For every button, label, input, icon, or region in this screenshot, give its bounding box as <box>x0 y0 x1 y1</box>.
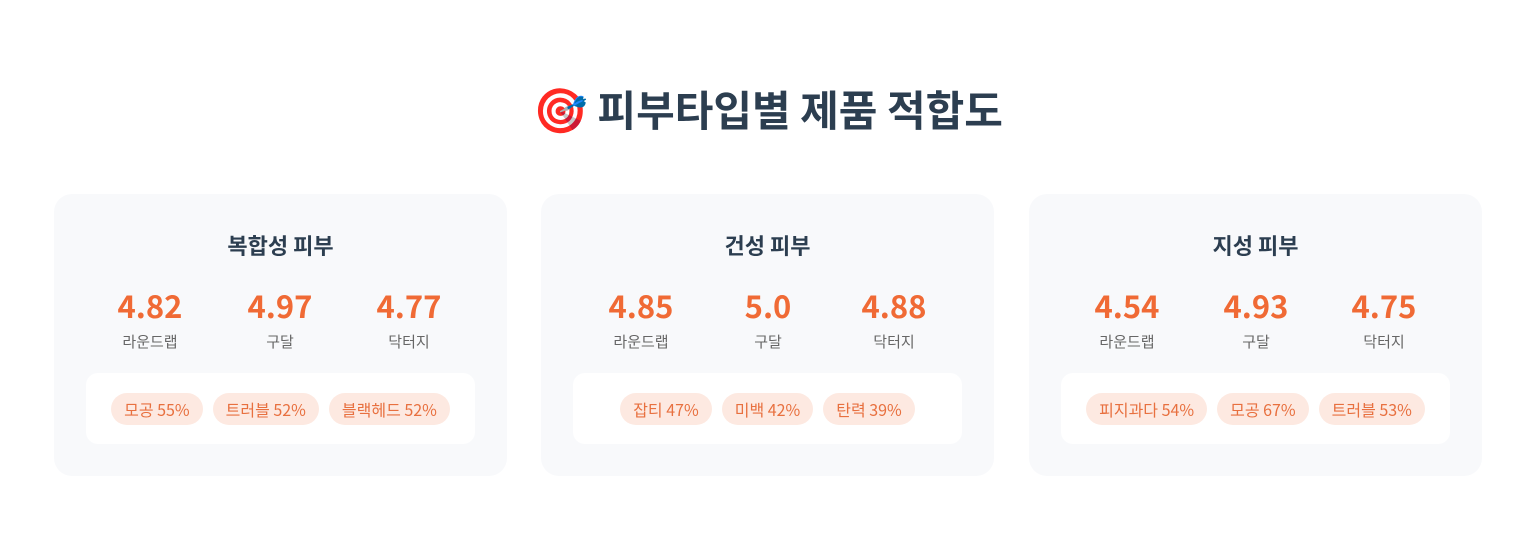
stat: goodal <box>1224 282 1288 352</box>
stat: goodal: 구달 <box>1242 331 1270 352</box>
stat: round lab: 라운드랩 <box>613 331 669 352</box>
stat: dr.g <box>862 282 926 352</box>
tags: 탄력 39% <box>836 396 902 420</box>
stat: round lab: 4.54 <box>1095 282 1159 327</box>
tags: 모공 67% <box>1230 396 1296 420</box>
stat: round lab <box>609 282 673 352</box>
card heading: 복합성 피부 <box>227 229 334 261</box>
stat: goodal: 4.97 <box>248 282 312 327</box>
panel: dry skin <box>541 194 994 476</box>
stat: goodal: 5.0 <box>745 282 791 327</box>
stat: round lab: 라운드랩 <box>122 331 178 352</box>
panel: combination skin <box>54 194 507 476</box>
tags: 모공 55% <box>124 396 190 420</box>
stat: dr.g: 닥터지 <box>1363 331 1405 352</box>
stat: goodal: 구달 <box>266 331 294 352</box>
stat: goodal: 4.93 <box>1224 282 1288 327</box>
tags: 피지과다 54% <box>1099 396 1194 420</box>
card heading: 지성 피부 <box>1213 229 1298 261</box>
stat: dr.g: 4.75 <box>1352 282 1416 327</box>
tags: 미백 42% <box>735 396 800 420</box>
tags <box>86 373 475 444</box>
stat: round lab <box>118 282 182 352</box>
tags: 블랙헤드 52% <box>342 396 437 420</box>
tags: 잡티 47% <box>633 396 699 420</box>
stat: round lab: 4.85 <box>609 282 673 327</box>
stat: dr.g: 4.77 <box>377 282 441 327</box>
tags <box>573 373 962 444</box>
stat: goodal: 구달 <box>754 331 782 352</box>
tags: 트러블 52% <box>226 396 306 420</box>
stat: goodal <box>248 282 312 352</box>
stat: dr.g: 닥터지 <box>388 331 430 352</box>
stat: round lab: 4.82 <box>118 282 182 327</box>
stat: round lab <box>1095 282 1159 352</box>
stat: round lab: 라운드랩 <box>1099 331 1155 352</box>
panel: oily skin <box>1029 194 1482 476</box>
tags: 트러블 53% <box>1332 396 1412 420</box>
title: 🎯 피부타입별 제품 적합도 <box>533 78 1003 139</box>
stat: dr.g: 닥터지 <box>873 331 915 352</box>
stat: goodal <box>745 282 791 352</box>
tags <box>1061 373 1450 444</box>
card heading: 건성 피부 <box>725 229 810 261</box>
stat: dr.g <box>1352 282 1416 352</box>
stat: dr.g <box>377 282 441 352</box>
stat: dr.g: 4.88 <box>862 282 926 327</box>
